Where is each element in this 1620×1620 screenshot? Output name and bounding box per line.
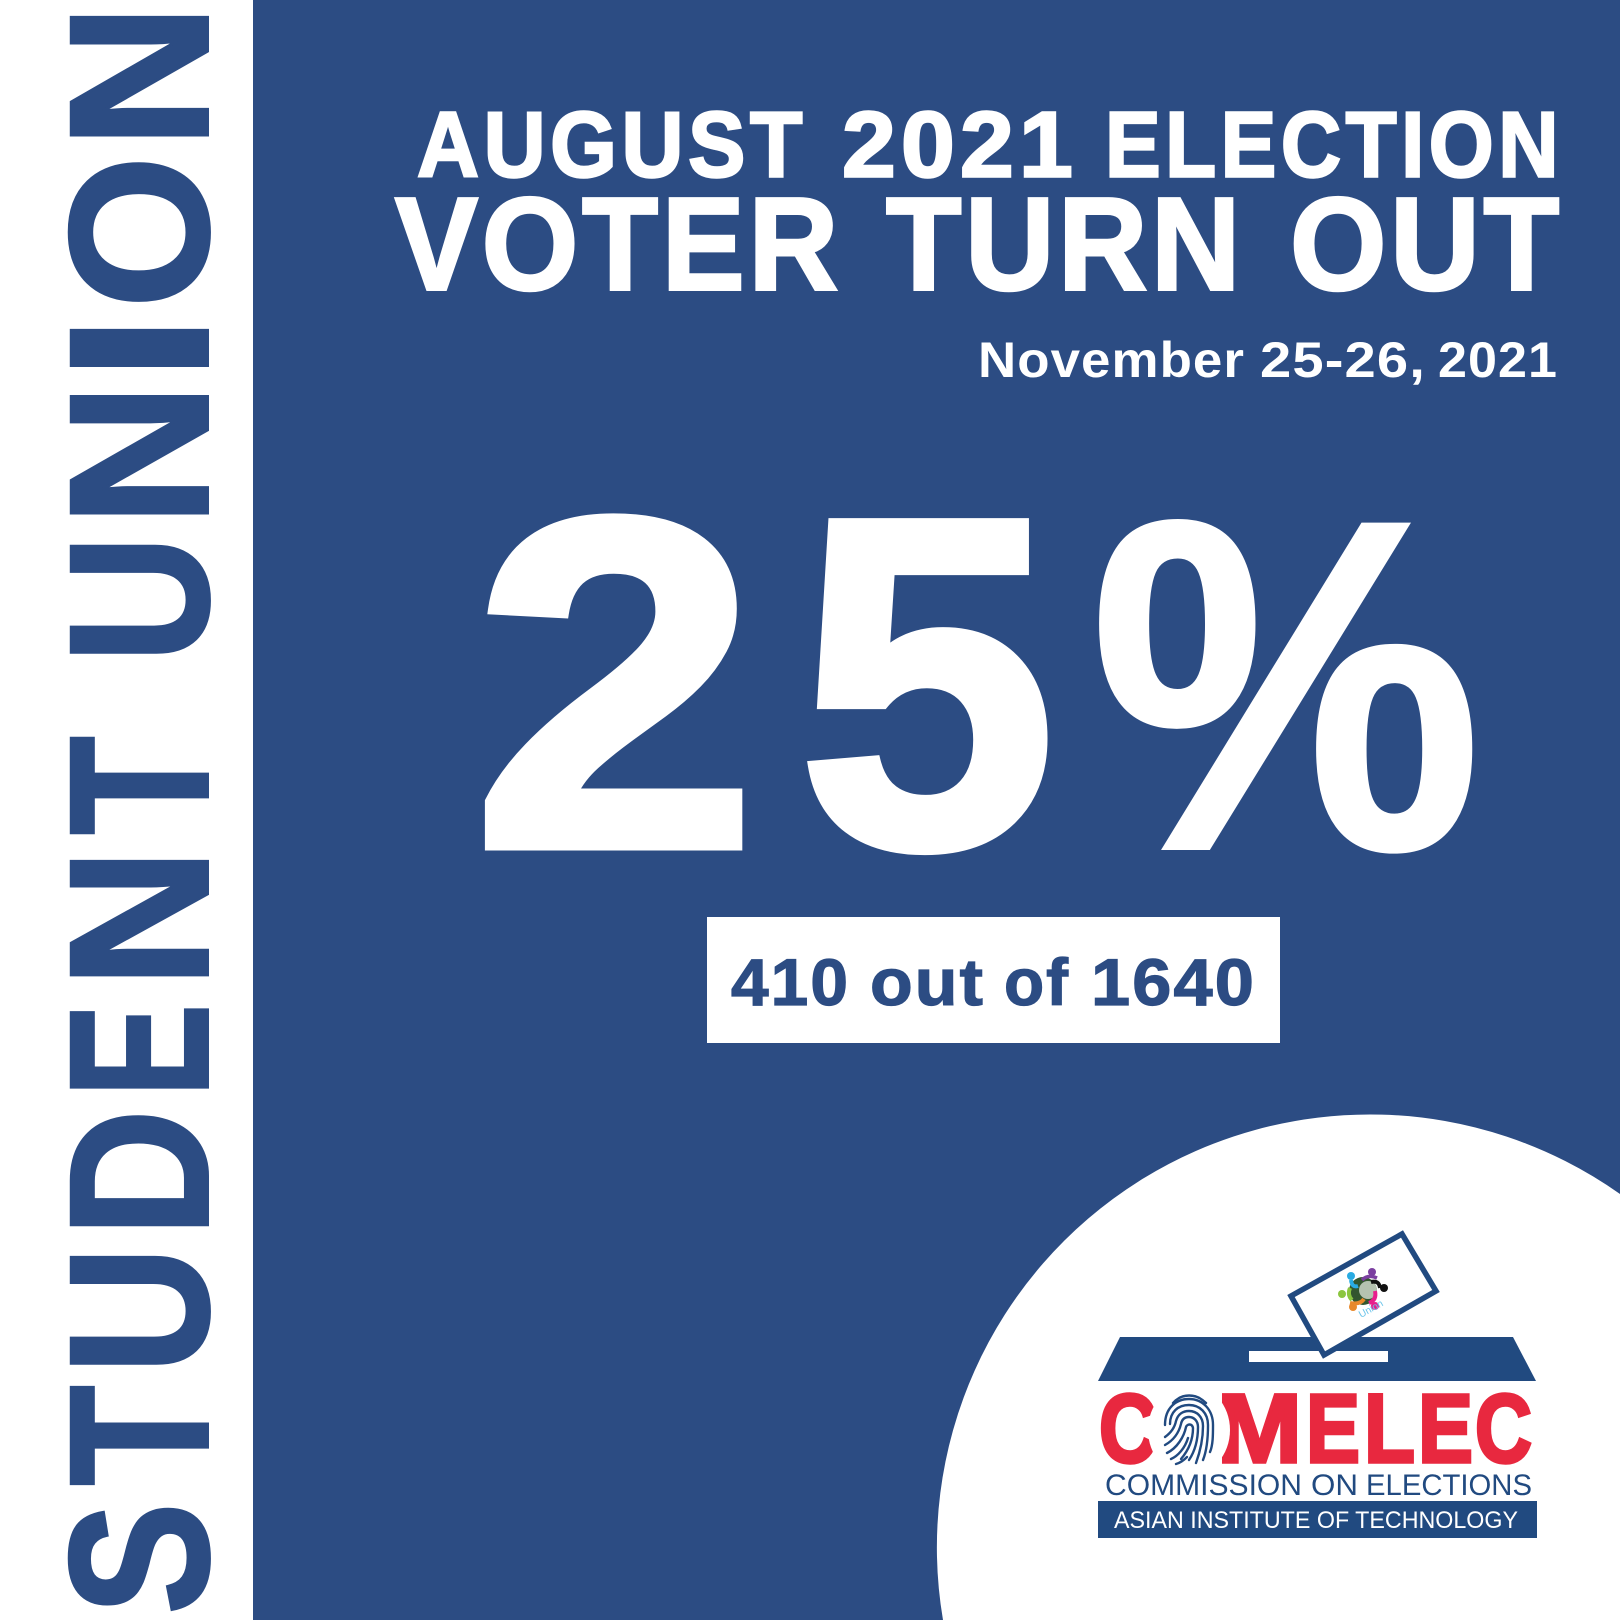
callout: vote count <box>707 917 1280 1043</box>
vertical title: student union: O <box>28 156 250 308</box>
vertical title: student union: U <box>28 1246 250 1374</box>
vertical title: student union: T <box>28 736 250 835</box>
big statistic: 25 percent: % <box>1090 423 1482 948</box>
vertical title: student union: E <box>28 1004 250 1097</box>
icon: fingerprint <box>1165 1396 1213 1464</box>
wordmark: comelec: E <box>1306 1374 1360 1483</box>
callout: vote count: of <box>1004 945 1070 1019</box>
banner: asian institute of technology <box>1098 1501 1537 1538</box>
text: election date: November <box>978 332 1245 388</box>
vertical title: student union: T <box>28 1385 250 1486</box>
heading: voter turn out: TURN <box>886 170 1244 318</box>
vertical title: student union: I <box>28 315 250 381</box>
heading: august 2021 election: ELECTION <box>1105 92 1563 196</box>
white circle corner <box>937 1114 1620 1620</box>
text: commission on elections: ELECTIONS <box>1366 1469 1532 1502</box>
icon: ballot box lid <box>1098 1337 1536 1381</box>
wordmark: comelec: C <box>1475 1374 1532 1483</box>
wordmark: comelec: L <box>1364 1374 1415 1483</box>
callout: vote count: 410 <box>731 945 850 1019</box>
wordmark: comelec: E <box>1418 1374 1473 1483</box>
logo: comelec <box>1098 1234 1537 1538</box>
heading: august 2021 election: 2021 <box>842 92 1078 196</box>
wordmark: comelec: C <box>1099 1374 1157 1483</box>
wordmark: comelec <box>1099 1374 1532 1483</box>
vertical title: student union: U <box>28 535 250 663</box>
big statistic: 25 percent <box>472 421 1482 948</box>
vertical title: student union: N <box>28 4 250 148</box>
callout: vote count: out <box>870 945 985 1019</box>
text: commission on elections: ON <box>1311 1469 1358 1502</box>
big statistic: 25 percent: 2 <box>472 421 758 946</box>
big statistic: 25 percent: 5 <box>798 421 1056 946</box>
vertical title: student union: D <box>28 1109 250 1237</box>
vertical title: student union: N <box>28 848 250 988</box>
icon: ballot paper <box>1291 1234 1436 1355</box>
heading: voter turn out: OUT <box>1290 170 1563 318</box>
text: commission on elections: COMMISSION <box>1105 1469 1302 1502</box>
icon: student union emblem: Union <box>1357 1298 1385 1321</box>
text: election date: 2021 <box>1438 332 1558 388</box>
vertical title: student union: S <box>28 1502 250 1614</box>
vertical title: student union: N <box>28 383 250 526</box>
text: election date: 25-26, <box>1260 332 1426 388</box>
wordmark: comelec: M <box>1217 1374 1302 1483</box>
heading: voter turn out: VOTER <box>395 170 842 318</box>
icon: student union emblem <box>1338 1268 1388 1321</box>
heading: august 2021 election: AUGUST <box>417 92 807 196</box>
callout: vote count: 1640 <box>1091 945 1256 1019</box>
banner: asian institute of technology: ASIAN INSTITUTE OF TECHNOLOGY <box>1114 1507 1518 1534</box>
